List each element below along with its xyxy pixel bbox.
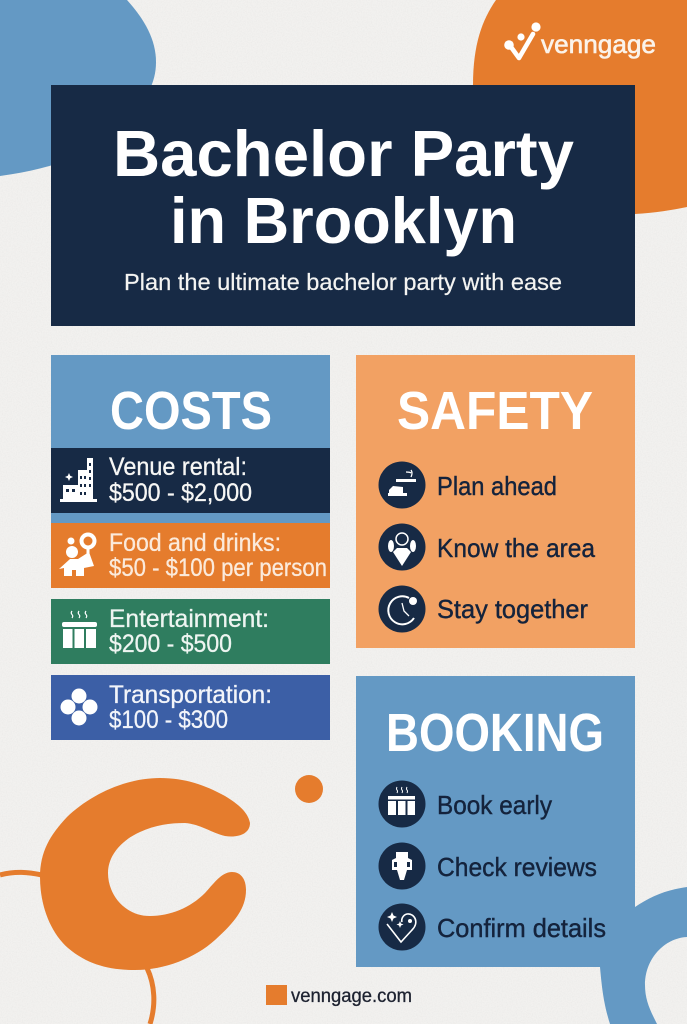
cost row: transportation: Transportation: (109, 681, 272, 709)
item: check reviews (378, 842, 597, 890)
title (113, 117, 574, 257)
title: Bachelor Party (113, 117, 574, 190)
blue blob top left (0, 0, 156, 176)
orange dot (295, 775, 323, 803)
item: stay together: Stay together (437, 594, 588, 624)
cost row: venue rental: $500 - $2,000 (109, 479, 252, 507)
blue ring bottom right (600, 887, 687, 1024)
cost row: food and drinks (51, 523, 330, 588)
item: know the area (378, 524, 596, 570)
icon: table with steam (62, 611, 97, 648)
cost row: entertainment: $200 - $500 (109, 630, 232, 658)
item: stay together (378, 586, 588, 632)
panel: booking (356, 676, 635, 967)
icon: clover (60, 688, 98, 726)
cost row: food and drinks: Food and drinks: (109, 529, 281, 557)
orange blob top right (473, 0, 687, 214)
item: check reviews: Check reviews (437, 852, 597, 882)
item: confirm details: Confirm details (437, 913, 606, 943)
cost row: transportation (51, 675, 330, 740)
heading: booking: BOOKING (386, 703, 604, 763)
footer: venngage.com: venngage.com (291, 986, 412, 1007)
cost row: venue rental (51, 448, 330, 513)
panel: safety (356, 355, 635, 648)
title panel (51, 85, 635, 326)
item: book early (378, 780, 552, 828)
title: in Brooklyn (170, 184, 517, 257)
item: know the area: Know the area (437, 533, 596, 563)
subtitle: Plan the ultimate bachelor party with ease (124, 269, 562, 295)
cost row: transportation: $100 - $300 (109, 706, 228, 734)
venngage logo: venngage (541, 29, 656, 59)
venngage logo (504, 22, 656, 59)
item: plan ahead: Plan ahead (437, 471, 557, 501)
item: confirm details (378, 904, 606, 950)
orange C shape decoration (0, 778, 250, 1024)
panel: costs (51, 355, 330, 523)
heading: safety: SAFETY (397, 381, 593, 441)
heading: costs: COSTS (110, 381, 272, 441)
cost row: entertainment: Entertainment: (109, 605, 269, 633)
icon: person with meter (59, 532, 96, 576)
cost row: food and drinks: $50 - $100 per person (109, 554, 327, 582)
item: book early: Book early (437, 790, 552, 820)
cost row: venue rental: Venue rental: (109, 453, 247, 481)
icon: buildings (60, 458, 97, 502)
cost row: entertainment (51, 599, 330, 664)
item: plan ahead (378, 462, 557, 508)
